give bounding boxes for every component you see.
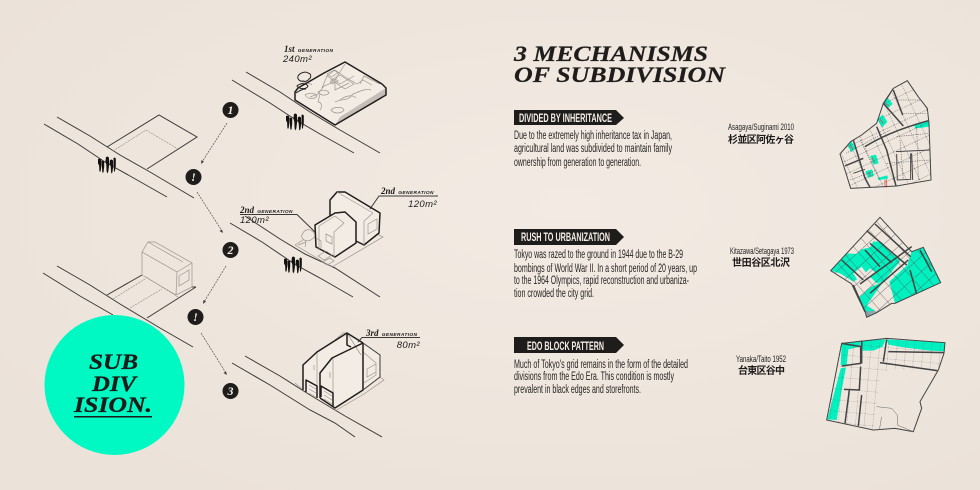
caption: Yanaka: 台東区谷中 xyxy=(738,364,785,377)
label: right 2nd generation: 2nd GENERATION xyxy=(380,186,434,196)
teal badge: subdivision: DIV xyxy=(91,371,139,396)
arrow: second warning to 3 xyxy=(201,333,227,375)
back house xyxy=(330,192,380,245)
teal badge: subdivision xyxy=(44,315,184,455)
label: 3rd generation: 3rd GENERATION xyxy=(365,328,418,338)
label: left 2nd generation xyxy=(239,205,315,232)
tag: DIVIDED BY INHERITANCE xyxy=(519,111,612,125)
warning marker 2 xyxy=(188,309,204,325)
house and garden block xyxy=(295,62,386,125)
caption: Yanaka xyxy=(736,354,786,377)
step marker 3 xyxy=(222,383,238,399)
label: right 2nd generation: 120m² xyxy=(408,199,437,210)
tag xyxy=(514,110,624,125)
tag: RUSH TO URBANIZATION xyxy=(521,230,610,244)
label: 1st generation: 240m² xyxy=(282,54,312,65)
caption: Asagaya xyxy=(728,122,794,146)
map: Yanaka xyxy=(827,338,945,432)
ground plate xyxy=(295,234,383,267)
grey house xyxy=(142,242,192,295)
panel: left vacant lot scene xyxy=(44,115,197,198)
body text xyxy=(514,359,688,396)
body text xyxy=(514,249,697,300)
arrow: 2 to second warning xyxy=(203,266,226,304)
icon: people xyxy=(284,256,302,274)
body text: Tokyo was razed to the ground in 1944 due to the B-29 xyxy=(514,249,683,261)
step marker 1 xyxy=(222,102,238,118)
lot xyxy=(107,275,196,318)
teal badge: subdivision: SUB xyxy=(89,349,138,374)
warning marker 1: ! xyxy=(191,170,196,184)
panel: left house-on-lot scene xyxy=(43,242,196,347)
caption: Kitazawa xyxy=(730,246,794,269)
section: divided by inheritance xyxy=(514,110,672,169)
body text: Much of Tokyo's grid remains in the form of the detailed xyxy=(514,359,688,371)
body text: ownership from generation to generation. xyxy=(514,157,641,169)
road xyxy=(232,356,382,437)
label: 3rd generation: 80m² xyxy=(397,340,420,351)
label: 1st generation: 1st GENERATION xyxy=(284,44,334,54)
vacant lot xyxy=(107,115,197,169)
step marker 2 xyxy=(222,242,238,258)
body text: divisions from the Edo Era. This condition is mostly xyxy=(514,371,674,383)
road xyxy=(44,117,194,198)
caption: Kitazawa: 世田谷区北沢 xyxy=(732,256,790,269)
label: right 2nd generation xyxy=(370,186,438,210)
caption: Asagaya: Asagaya/Suginami 2010 xyxy=(728,122,794,132)
tag xyxy=(514,337,624,353)
road xyxy=(43,266,193,347)
warning marker 1 xyxy=(186,169,202,185)
body text: Due to the extremely high inheritance tax in Japan, xyxy=(514,130,672,142)
tag xyxy=(514,229,624,245)
teal badge: subdivision: ISION. xyxy=(73,392,152,417)
step marker 3: 3 xyxy=(226,384,234,398)
step marker 2: 2 xyxy=(226,243,234,257)
label: 1st generation xyxy=(282,44,334,65)
caption: Yanaka: Yanaka/Taito 1952 xyxy=(736,354,786,364)
body text: agricultural land was subdivided to maintain family xyxy=(514,143,672,155)
arrow: first warning to 2 xyxy=(197,192,223,233)
icon: people xyxy=(98,156,116,174)
label: left 2nd generation: 2nd GENERATION xyxy=(239,205,293,215)
title xyxy=(513,41,726,87)
warning marker 2: ! xyxy=(193,310,198,324)
panel: third generation scene xyxy=(232,328,420,437)
caption: Asagaya: 杉並区阿佐ヶ谷 xyxy=(728,133,794,146)
panel: first generation scene xyxy=(232,44,386,153)
step marker 1: 1 xyxy=(228,103,234,117)
section: edo block pattern xyxy=(514,337,688,396)
label: 3rd generation xyxy=(358,328,420,351)
body text: tion crowded the city grid. xyxy=(514,288,594,300)
label: left 2nd generation: 120m² xyxy=(240,215,269,226)
body text: bombings of World War II. In a short period of 20 years, up xyxy=(514,263,697,275)
steps xyxy=(318,251,334,265)
map: Kitazawa xyxy=(831,217,941,317)
title: 3 MECHANISMS xyxy=(513,41,708,66)
arrow: 1 to first warning xyxy=(201,123,227,164)
road xyxy=(230,216,380,297)
body text xyxy=(514,130,672,169)
body text: prevalent in black edges and storefronts. xyxy=(514,384,641,396)
panel: second generation scene xyxy=(230,186,438,297)
row houses xyxy=(295,333,384,411)
icon: people xyxy=(286,114,304,130)
map: Asagaya xyxy=(840,81,931,188)
section: rush to urbanization xyxy=(514,229,697,300)
tag: EDO BLOCK PATTERN xyxy=(527,339,604,353)
body text: to the 1964 Olympics, rapid reconstruction and urbaniza- xyxy=(514,275,689,287)
caption: Kitazawa: Kitazawa/Setagaya 1973 xyxy=(730,246,794,256)
front house xyxy=(315,212,356,257)
road xyxy=(232,72,380,153)
title: OF SUBDIVISION xyxy=(514,62,726,87)
tree xyxy=(298,230,315,247)
